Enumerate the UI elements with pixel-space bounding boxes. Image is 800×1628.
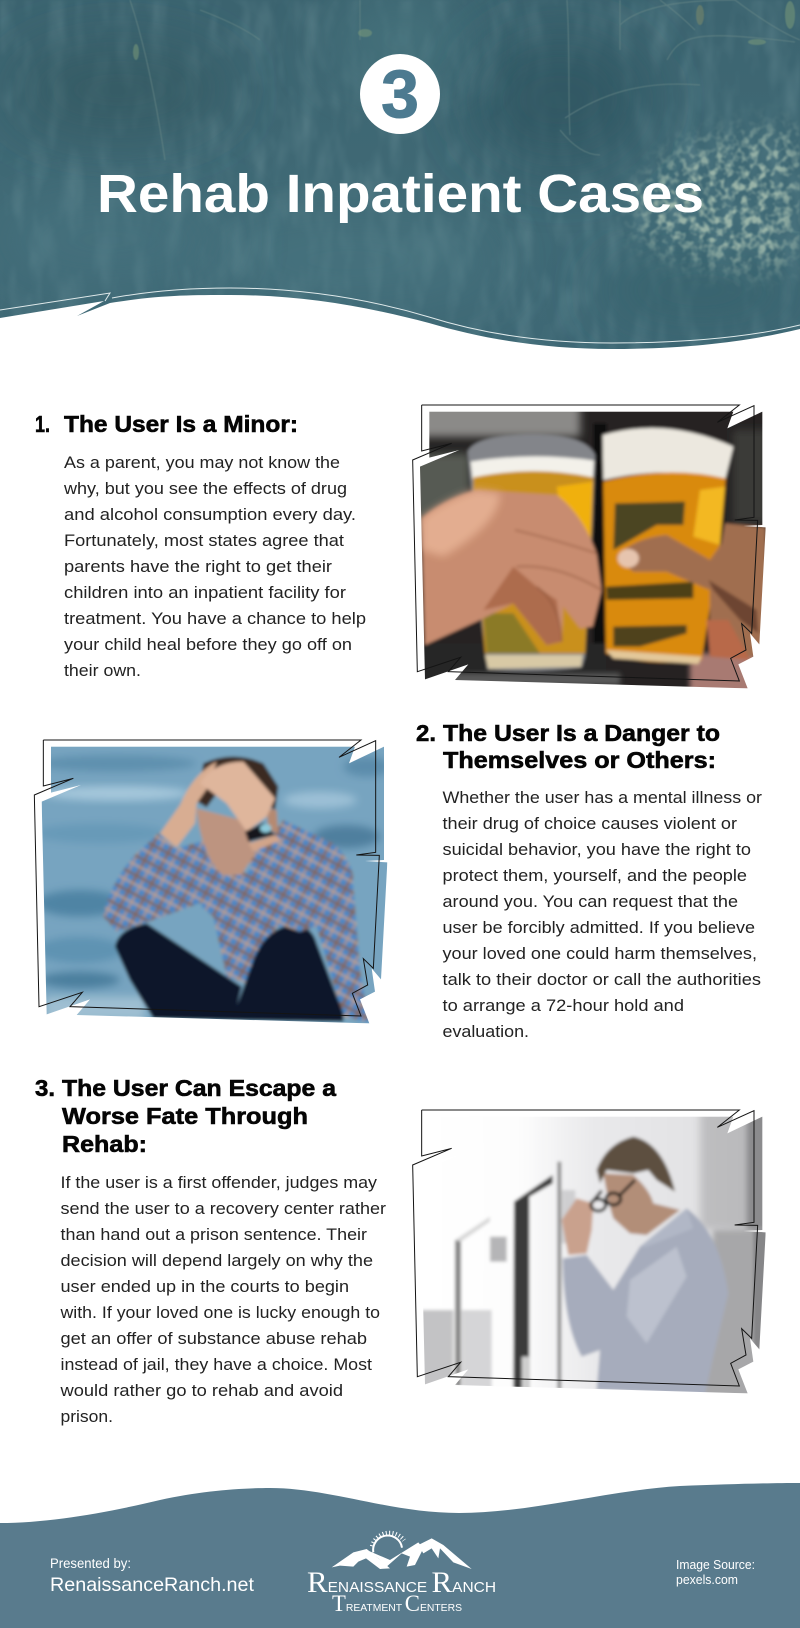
body 3: send the user to a recovery center rather [60,1200,387,1218]
body 3: user ended up in the courts to begin [60,1278,349,1296]
section 1 text [35,411,366,680]
body 2: Whether the user has a mental illness or [442,789,763,807]
photo: man holding his head [34,740,388,1024]
body 3: than hand out a prison sentence. Their [60,1226,368,1244]
photo: two beers clinking [412,404,766,688]
torso [202,820,369,1023]
legs [115,923,242,1020]
footer: presented by: RenaissanceRanch.net [50,1574,255,1596]
body 1: why, but you see the effects of drug [63,480,347,498]
body 3 [59,1174,387,1426]
man shirt [563,1208,728,1395]
body 1: your child heal before they go off on [64,636,352,654]
body 1: and alcohol consumption every day. [64,506,356,524]
heading 2: Themselves or Others: [443,747,716,773]
body 1: parents have the right to get their [64,558,333,576]
heading 1: 1. [35,411,50,437]
section 2 text [416,720,763,1041]
logo: Renaissance Ranch [307,1533,496,1616]
section 3 text [35,1075,387,1426]
number badge: 3 [381,56,419,132]
glasses [591,1180,635,1211]
body 3: If the user is a first offender, judges may [60,1174,378,1192]
body 3: instead of jail, they have a choice. Most [60,1356,373,1374]
left arm [103,833,207,932]
body 2: around you. You can request that the [442,893,738,911]
heading 1: The User Is a Minor: [64,411,298,437]
heading 2: The User Is a Danger to [443,720,720,746]
body 3: decision will depend largely on why the [60,1252,373,1270]
heading 3: Worse Fate Through [62,1103,308,1129]
body 1: children into an inpatient facility for [64,584,347,602]
watch [245,823,275,842]
right hand [617,523,766,657]
body 2: talk to their doctor or call the authorities [442,971,761,989]
body 2: your loved one could harm themselves, [442,945,757,963]
body 2: suicidal behavior, you have the right to [442,841,751,859]
footer: image source: Image Source: [676,1558,755,1572]
body 2: protect them, yourself, and the people [442,867,747,885]
right arm [248,838,353,932]
left hand [422,490,602,645]
body 3: prison. [60,1408,113,1426]
hands [160,762,217,847]
body 2 [442,789,763,1041]
man face [603,1173,680,1235]
header banner [0,0,800,360]
body 1: their own. [64,662,141,680]
header white wave [0,295,800,360]
footer: image source: pexels.com [676,1573,738,1587]
body 2: user be forcibly admitted. If you believe [442,919,755,937]
title: Rehab Inpatient Cases [97,164,704,224]
head [197,808,255,875]
logo mountains and sun [332,1533,472,1569]
footer: presented by: Presented by: [50,1556,131,1571]
left glass [468,434,595,671]
body 3: would rather go to rehab and avoid [59,1382,343,1400]
logo wordmark: RENAISSANCE RANCH [307,1566,496,1599]
heading 3 [35,1075,337,1157]
man hair [597,1137,675,1192]
logo tagline: TREATMENT CENTERS [332,1591,462,1616]
body 1: As a parent, you may not know the [64,454,340,472]
footer: image source [676,1558,755,1587]
body 2: evaluation. [442,1023,529,1041]
body 2: their drug of choice causes violent or [442,815,738,833]
body 1 [63,454,366,680]
body 3: get an offer of substance abuse rehab [60,1330,367,1348]
heading 3: Rehab: [62,1131,147,1157]
footer band [0,1483,800,1628]
body 1: treatment. You have a chance to help [64,610,366,628]
heading 2 [416,720,720,773]
heading 3: 3. [35,1075,55,1101]
photo: man pinching his nose with glasses in hand [412,1110,766,1394]
body 2: to arrange a 72-hour hold and [442,997,684,1015]
body 1: Fortunately, most states agree that [64,532,345,550]
body 3: with. If your loved one is lucky enough to [59,1304,380,1322]
man hand [562,1198,593,1255]
heading 3: The User Can Escape a [62,1075,337,1101]
right glass [603,428,733,480]
heading 2: 2. [416,720,436,746]
footer: presented by [50,1556,255,1596]
number badge [360,54,440,134]
